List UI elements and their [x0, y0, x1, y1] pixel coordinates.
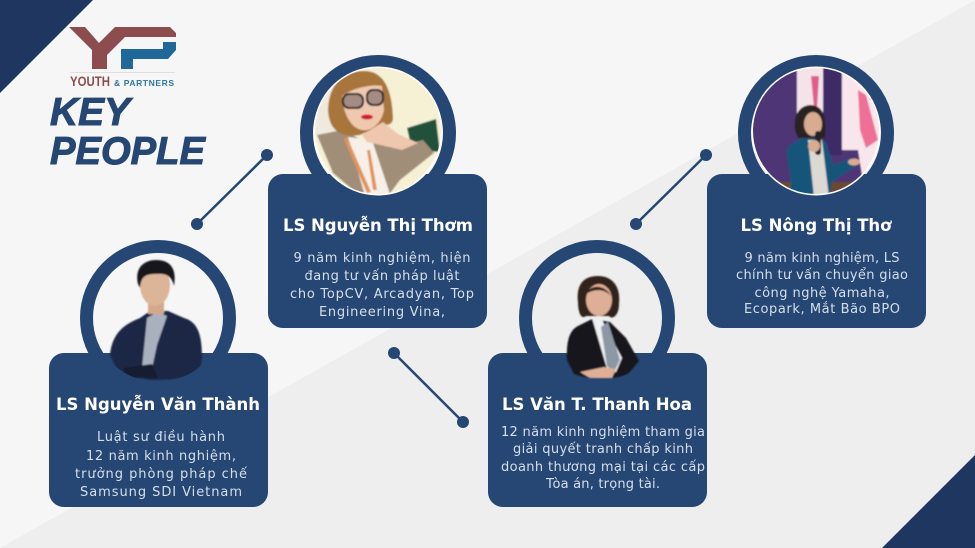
description [75, 430, 247, 500]
description: Luật sư điều hành [97, 430, 225, 445]
description: cho TopCV, Arcadyan, Top [290, 287, 474, 302]
description: trưởng phòng pháp chế [75, 467, 247, 482]
title: KEY PEOPLE: KEY [50, 91, 133, 134]
panel: LS Văn T. Thanh Hoa [488, 246, 707, 507]
panel: LS Nguyễn Văn Thành [49, 246, 268, 507]
logo: Youth & Partners [69, 27, 176, 89]
description: Ecopark, Mắt Bão BPO [744, 302, 900, 317]
description: doanh thương mại tại các cấp [501, 460, 705, 475]
description: 9 năm kinh nghiệm, LS [744, 251, 900, 266]
description: 12 năm kinh nghiệm, [86, 449, 236, 464]
description: Engineering Vina, [319, 305, 445, 320]
photo: Nguyễn Văn Thành [110, 260, 202, 380]
panel: LS Nông Thị Thơ [707, 62, 926, 328]
description: chính tư vấn chuyển giao [736, 268, 908, 283]
description [736, 251, 908, 317]
title: KEY PEOPLE [50, 91, 206, 173]
photo: Nguyễn Thị Thơm [310, 65, 446, 197]
connector: top left [191, 149, 273, 230]
connector: center [388, 347, 469, 428]
name: LS Nông Thị Thơ [740, 216, 892, 235]
connector: top right [630, 149, 712, 230]
photo: Nông Thị Thơ [750, 65, 886, 198]
photo: Văn T. Thanh Hoa [567, 276, 639, 378]
description: giải quyết tranh chấp kinh [513, 442, 693, 457]
description: công nghệ Yamaha, [754, 286, 890, 301]
corner triangle: bottom right [882, 455, 975, 548]
description: 12 năm kinh nghiệm tham gia [501, 425, 705, 440]
description: Samsung SDI Vietnam [80, 485, 242, 500]
name: LS Nguyễn Thị Thơm [283, 216, 473, 235]
description [501, 425, 705, 492]
name: LS Nguyễn Văn Thành [56, 395, 260, 414]
description: đang tư vấn pháp luật [304, 269, 460, 284]
logo: Youth & Partners: & PARTNERS [114, 78, 174, 88]
corner triangle: top left [0, 0, 93, 93]
name: LS Văn T. Thanh Hoa [502, 395, 692, 414]
description: 9 năm kinh nghiệm, hiện [294, 251, 470, 266]
description [290, 251, 474, 320]
title: KEY PEOPLE: PEOPLE [50, 130, 206, 173]
logo: Youth & Partners: YOUTH [70, 73, 110, 89]
panel: LS Nguyễn Thị Thơm [268, 62, 487, 328]
description: Tòa án, trọng tài. [545, 477, 660, 492]
